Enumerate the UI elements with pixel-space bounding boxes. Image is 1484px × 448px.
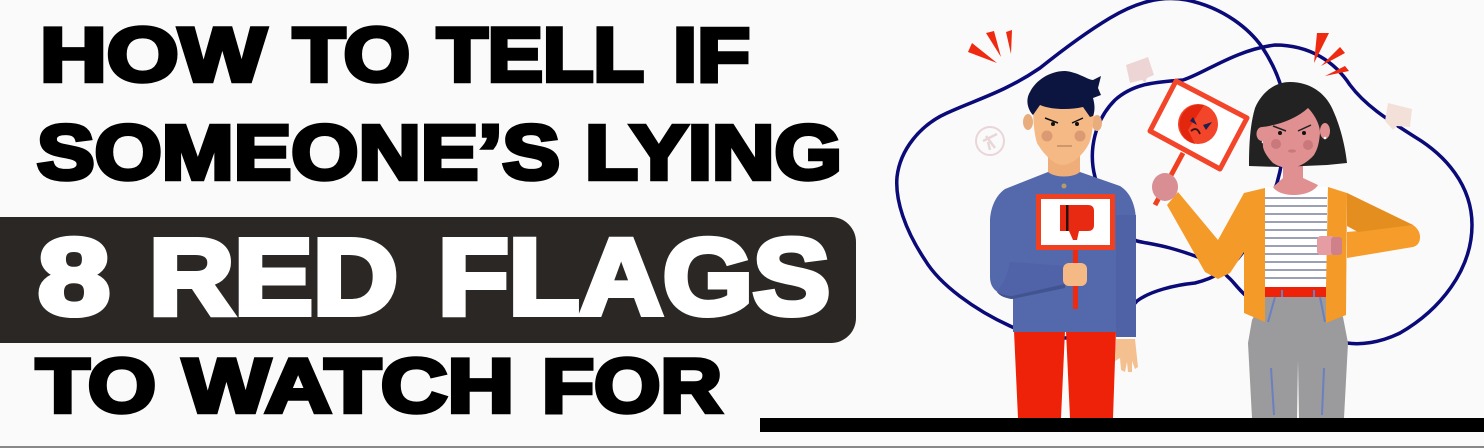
man sign stick (1073, 250, 1078, 309)
woman angry face sign (1150, 81, 1247, 169)
title line: how to tell if: TO (293, 13, 410, 98)
woman face (1256, 108, 1330, 168)
title line: someone's lying (37, 110, 842, 196)
man hair (1027, 71, 1101, 117)
title line: how to tell if (40, 13, 750, 98)
icon: pale share circle (976, 127, 1004, 155)
woman figure (1150, 81, 1420, 418)
title line: how to tell if: IF (673, 13, 750, 98)
man neck (1048, 150, 1080, 178)
dark banner with 8 red flags heading (0, 216, 856, 343)
man forearm shadow (997, 284, 1065, 299)
woman bent sleeve (1347, 193, 1420, 258)
title line: someone's lying: LYING (585, 110, 842, 196)
man raised fist (1063, 263, 1087, 286)
dark banner with 8 red flags heading: RED (149, 216, 398, 337)
woman jacket left panel and raised arm (1167, 188, 1265, 322)
title line: how to tell if: HOW (40, 13, 266, 98)
woman neck (1273, 160, 1318, 195)
title line: to watch for: WATCH (183, 344, 514, 429)
man head (1023, 105, 1102, 165)
title line: how to tell if: TELL (437, 13, 644, 98)
woman jacket right panel (1326, 187, 1347, 323)
man sweater (990, 172, 1136, 337)
decorative blob outlines (897, 0, 1472, 344)
icon: pale speech note right (1385, 103, 1412, 130)
title line: to watch for: TO (36, 344, 156, 429)
woman trousers (1248, 296, 1348, 418)
icon: right red burst (1314, 33, 1349, 76)
man lowered hand (1115, 339, 1138, 372)
man folded forearm (997, 262, 1065, 299)
woman upper sleeve shading (1347, 193, 1413, 232)
title line: to watch for: FOR (542, 344, 722, 429)
title line: to watch for (36, 344, 722, 429)
icon: left red burst (968, 30, 1012, 63)
woman sign stick (1155, 153, 1183, 205)
woman fist at waist (1317, 236, 1342, 255)
man sleeve shading (1116, 215, 1136, 337)
woman trouser seams (1271, 368, 1324, 415)
man figure (990, 71, 1138, 418)
woman striped shirt (1265, 187, 1327, 287)
man collar button (1062, 184, 1066, 188)
woman hair (1249, 82, 1347, 167)
icon: pale speech note top (1126, 57, 1154, 83)
man trousers (1014, 331, 1116, 418)
title line: someone's lying: SOMEONE’S (37, 110, 560, 196)
dark banner with 8 red flags heading: FLAGS (438, 216, 830, 337)
woman belt (1265, 287, 1326, 297)
ground bar (760, 418, 1484, 432)
woman raised fist (1152, 173, 1178, 201)
dark banner with 8 red flags heading: 8 (38, 216, 110, 337)
man sign with thumbs down (1038, 196, 1112, 248)
woman pocket lines (1268, 290, 1325, 322)
